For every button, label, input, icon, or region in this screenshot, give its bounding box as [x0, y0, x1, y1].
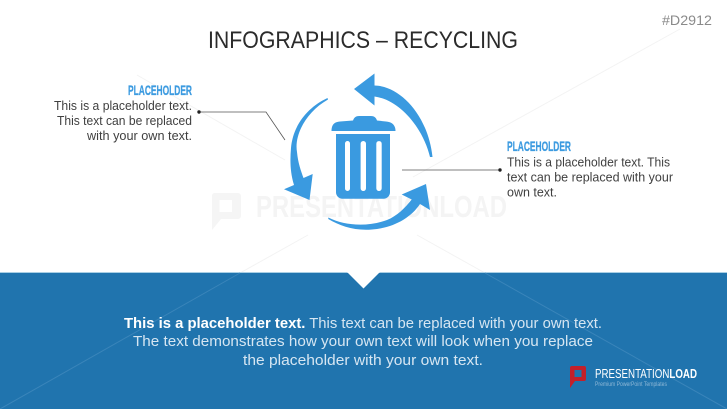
logo wordmark: PRESENTATIONLOAD [595, 366, 697, 381]
left body text: with your own text. [86, 128, 192, 143]
bin lid [332, 116, 396, 131]
left heading: PLACEHOLDER [128, 82, 192, 98]
left text block [54, 82, 192, 143]
right body text: This is a placeholder text. This [507, 154, 670, 170]
banner text: The text demonstrates how your own text will look when you replace [133, 333, 593, 350]
banner text: the placeholder with your own text. [243, 352, 483, 369]
left leader line [197, 110, 285, 140]
left body text: This is a placeholder text. [54, 98, 192, 113]
logo tagline: Premium PowerPoint Templates [595, 382, 667, 388]
right body text: own text. [507, 184, 557, 200]
banner notch [347, 272, 380, 288]
arrow: bottom [328, 184, 430, 230]
watermark [137, 29, 680, 273]
right text block [507, 138, 674, 200]
right heading: PLACEHOLDER [507, 138, 571, 154]
banner text: This is a placeholder text. This text can be replaced with your own text. [124, 315, 602, 332]
right leader line [402, 168, 502, 172]
PresentationLoad logo [570, 366, 697, 388]
arrow: top right [354, 74, 432, 157]
arrow: left [284, 98, 328, 200]
recycling icon [284, 74, 432, 230]
icon: trash bin [332, 116, 396, 199]
right body text [507, 154, 674, 200]
watermark: PRESENTATIONLOAD [256, 189, 507, 224]
slide code: #D2912 [662, 12, 712, 28]
title: INFOGRAPHICS – RECYCLING [208, 27, 518, 54]
left body text [54, 98, 192, 143]
right body text: text can be replaced with your [507, 170, 674, 184]
bin body [336, 134, 390, 199]
logo mark [570, 366, 586, 388]
left body text: This text can be replaced [57, 113, 192, 128]
bottom banner [0, 272, 727, 409]
banner text [124, 315, 602, 369]
